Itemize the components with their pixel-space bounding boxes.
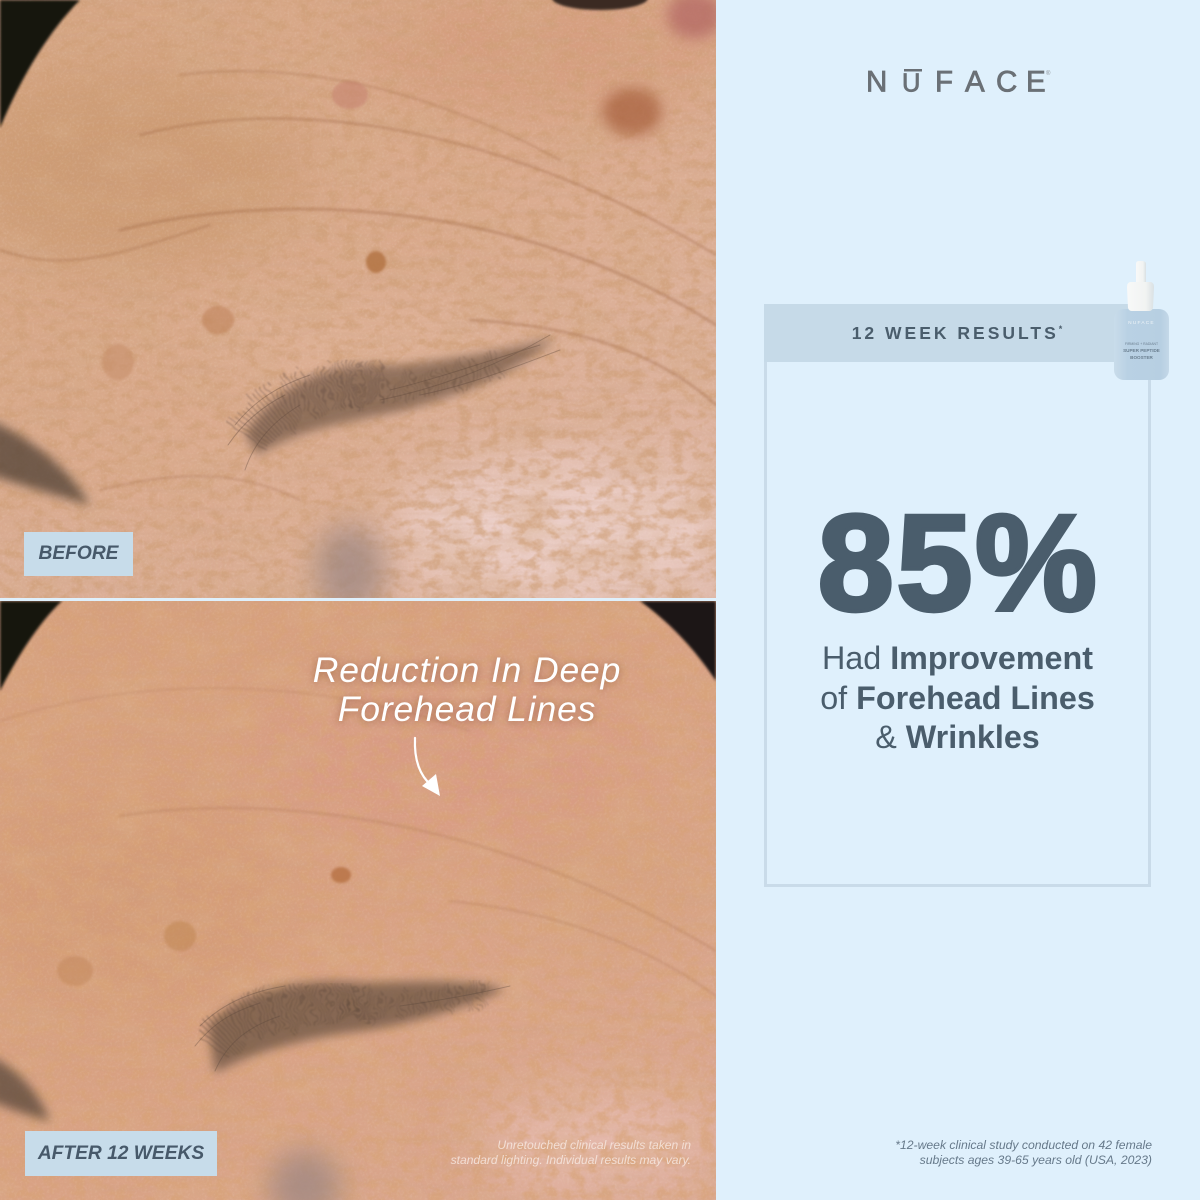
tone variation (0, 671, 720, 1191)
footnote: study details: subjects ages 39-65 years old (USA, 2023) (920, 1153, 1152, 1167)
red blemish upper right (602, 88, 662, 136)
label: before (24, 532, 133, 576)
icon: serum bottle: NUFACE (1128, 320, 1155, 326)
brand logo: U (902, 70, 920, 98)
label: after 12 weeks (25, 1131, 217, 1176)
age spots (57, 867, 351, 986)
panel header: 12 WEEK RESULTS* (852, 323, 1062, 343)
brand logo (866, 66, 1051, 98)
forehead wrinkles (0, 71, 716, 500)
icon: serum bottle (1114, 261, 1169, 380)
skin base (0, 601, 716, 1200)
brand logo: F (935, 66, 953, 98)
eyebrow (195, 981, 510, 1073)
skin base (0, 0, 716, 598)
big stat: 85% (818, 487, 1099, 640)
panel: after photo of forehead (0, 601, 716, 1200)
callout: reduction in deep forehead lines: Forehead Lines (338, 689, 596, 729)
stat description: & Wrinkles (875, 719, 1040, 755)
arrow: pointing to forehead (414, 736, 440, 796)
footnote: study details: *12-week clinical study conducted on 42 female (895, 1138, 1152, 1152)
faint wrinkles (0, 688, 716, 996)
left eye brow corner (0, 420, 90, 505)
brand logo: E (1026, 66, 1046, 98)
stat description (820, 640, 1095, 755)
panel: before photo of forehead (0, 0, 716, 598)
footnote: study details (895, 1138, 1152, 1167)
nose bridge shadow (269, 1150, 341, 1200)
disclaimer: clinical photo: Unretouched clinical results taken in (497, 1138, 691, 1152)
icon: serum bottle: SUPER PEPTIDE (1123, 348, 1160, 353)
icon: serum bottle: BOOSTER (1130, 355, 1154, 360)
callout: reduction in deep forehead lines (312, 650, 622, 729)
label: before: BEFORE (39, 543, 118, 564)
callout: reduction in deep forehead lines: Reduction In Deep (313, 650, 621, 690)
panel header (764, 304, 1151, 362)
stat description: of Forehead Lines (820, 680, 1095, 716)
tone variation (0, 0, 740, 620)
age spots (102, 81, 386, 380)
panel border (764, 362, 1151, 887)
eyebrow (228, 335, 560, 470)
disclaimer: clinical photo: standard lighting. Individual results may vary. (451, 1153, 691, 1167)
stat description: Had Improvement (822, 640, 1093, 676)
left eye brow corner (0, 1056, 50, 1121)
dark hair corner (0, 0, 80, 128)
panel: 12 week results (764, 304, 1151, 887)
brand logo: A (965, 66, 985, 98)
brand logo: N (866, 66, 887, 98)
label: after 12 weeks: AFTER 12 WEEKS (38, 1142, 204, 1164)
dark hair corners (0, 601, 62, 691)
disclaimer: clinical photo (450, 1138, 691, 1167)
brand logo: C (996, 66, 1017, 98)
nose bridge shadow (316, 525, 384, 615)
brand logo: ® (1046, 70, 1051, 77)
icon: serum bottle: FIRMING + RADIANT (1125, 342, 1158, 346)
